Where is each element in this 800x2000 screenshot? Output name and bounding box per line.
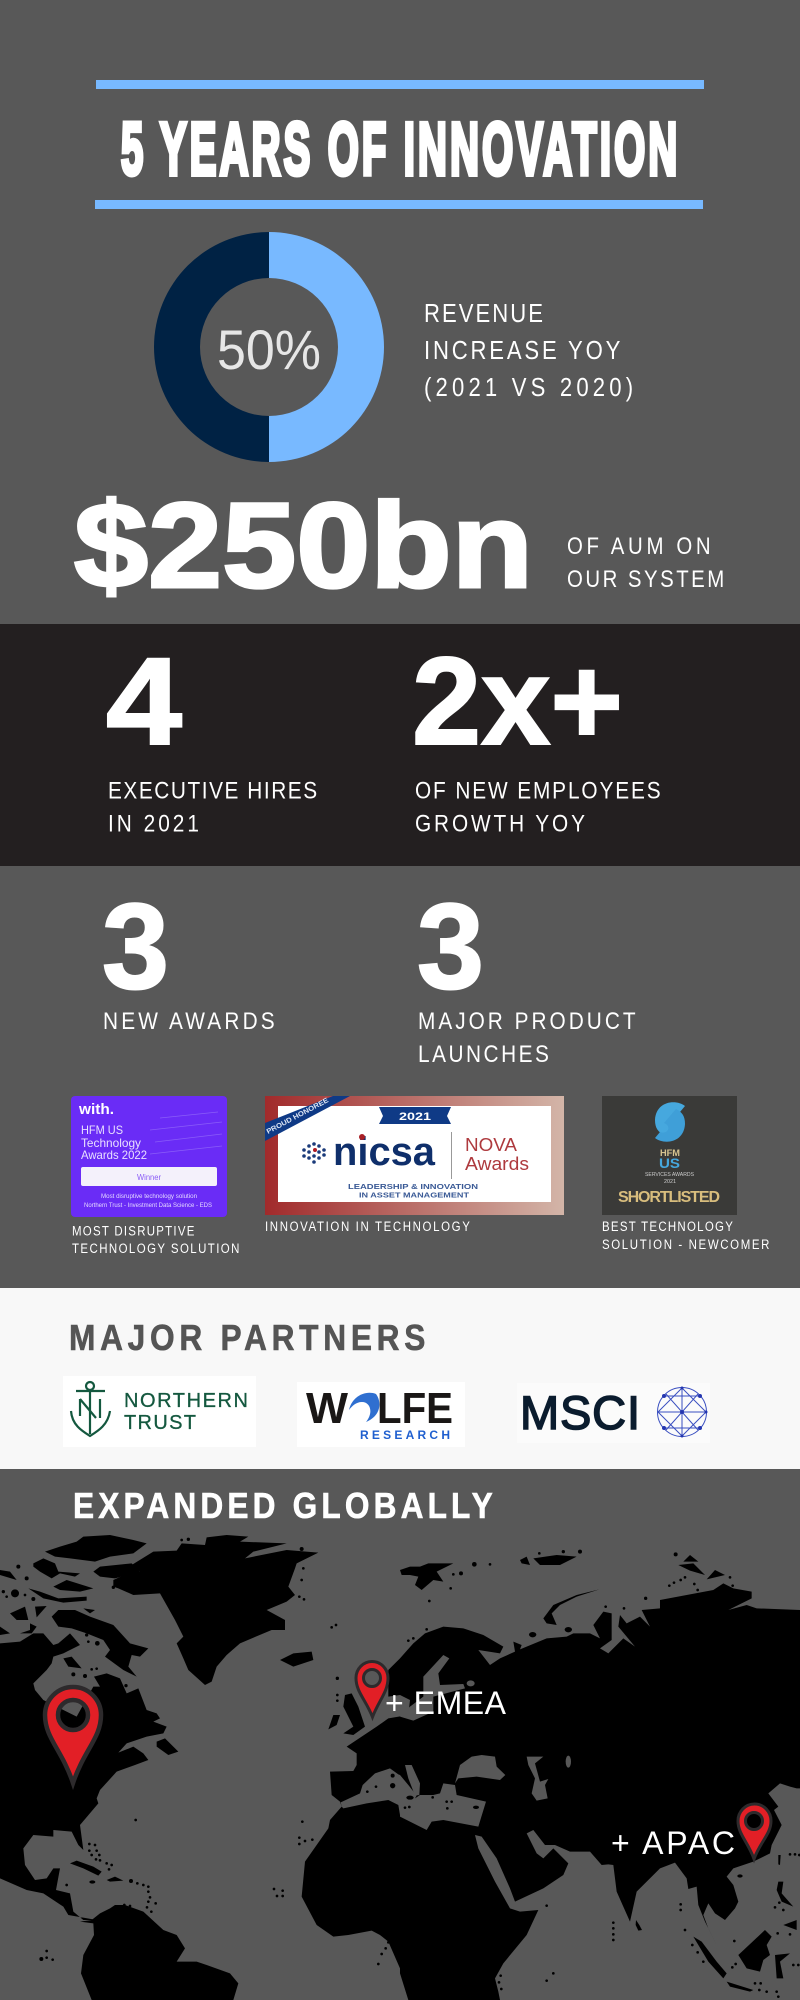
logo: Wolfe Research: LFE: [377, 1384, 453, 1433]
award captions: MOST DISRUPTIVE: [72, 1224, 194, 1239]
award badge: HFM US shortlisted: SHORTLISTED: [618, 1189, 720, 1206]
panel: major partners: [0, 1288, 800, 1469]
award badge: HFM US shortlisted: HFM: [660, 1148, 680, 1158]
donut chart: 50% revenue increase: [154, 232, 384, 462]
heading: major partners: MAJOR PARTNERS: [69, 1318, 425, 1358]
revenue label: [424, 299, 633, 402]
award badge: HFM US shortlisted: SERVICES AWARDS: [645, 1172, 695, 1178]
stat: major product launches: MAJOR PRODUCT: [418, 1006, 636, 1034]
award badge: nicsa NOVA: Awards: [465, 1154, 529, 1174]
heading: expanded globally: EXPANDED GLOBALLY: [73, 1486, 493, 1526]
stat: major product launches: 3: [417, 878, 484, 1014]
logo: MSCI: [517, 1383, 710, 1443]
stat: new awards: NEW AWARDS: [103, 1006, 275, 1034]
stat: new employee growth: [412, 633, 661, 837]
award badge: nicsa NOVA: 2021: [399, 1111, 431, 1123]
award badge: HFM US shortlisted: US: [659, 1155, 680, 1171]
stat: new awards: [102, 878, 275, 1034]
award badge: nicsa NOVA: nicsa: [333, 1130, 436, 1174]
award badge: with intelligence HFM: [71, 1096, 227, 1217]
award badge: with intelligence HFM: Winner: [137, 1173, 161, 1182]
Eurasia and Africa: [302, 1583, 800, 2000]
award badge: nicsa NOVA: IN ASSET MANAGEMENT: [359, 1190, 469, 1200]
award badge: with intelligence HFM: Awards 2022: [81, 1148, 147, 1162]
award badge: with intelligence HFM: Most disruptive technology solution: [101, 1194, 197, 1200]
pin: EMEA: [356, 1662, 388, 1717]
award badge: nicsa NOVA: NOVA: [465, 1135, 517, 1155]
logo: Northern Trust: NORTHERN: [124, 1390, 248, 1412]
stat: new employee growth: 2x+: [412, 633, 623, 771]
award badge: with intelligence HFM: with.: [78, 1101, 114, 1118]
award badge: nicsa NOVA: LEADERSHIP & INNOVATION: [348, 1182, 478, 1191]
label: EMEA: + EMEA: [385, 1685, 507, 1721]
title block: 5 YEARS OF INNOVATION: [121, 107, 677, 191]
AUM stat: OF AUM ON: [567, 532, 711, 559]
award badge: HFM US shortlisted: 2021: [664, 1179, 676, 1185]
revenue label: REVENUE: [424, 299, 543, 328]
revenue label: INCREASE YOY: [424, 336, 620, 365]
stat: new employee growth: GROWTH YOY: [415, 809, 585, 837]
pin: North America: [45, 1687, 101, 1783]
stat: new employee growth: OF NEW EMPLOYEES: [415, 776, 661, 804]
logo: Wolfe Research: W: [306, 1384, 348, 1433]
stat: new awards: 3: [102, 878, 169, 1014]
award badge: with intelligence HFM: Technology: [81, 1136, 141, 1150]
award captions: TECHNOLOGY SOLUTION: [72, 1241, 239, 1256]
logo: MSCI: MSCI: [520, 1386, 640, 1439]
award captions: BEST TECHNOLOGY: [602, 1219, 733, 1234]
small islands: [2, 1538, 800, 1998]
award captions: [72, 1219, 769, 1256]
logo: Wolfe Research: [297, 1382, 465, 1447]
revenue label: (2021 VS 2020): [424, 373, 633, 402]
AUM stat: $250bn: [74, 477, 533, 613]
award badge: nicsa NOVA: PROUD HONOREE: [266, 1097, 330, 1136]
stat: executive hires: [106, 633, 317, 837]
logo: Northern Trust: TRUST: [124, 1412, 196, 1434]
award badge: nicsa NOVA: [265, 1096, 564, 1215]
stat: major product launches: LAUNCHES: [418, 1039, 549, 1067]
stat: major product launches: [417, 878, 636, 1067]
award captions: SOLUTION - NEWCOMER: [602, 1237, 769, 1252]
panel: hires and employees: [0, 624, 800, 866]
award badge: HFM US shortlisted: [602, 1096, 737, 1215]
AUM stat: OUR SYSTEM: [567, 565, 724, 592]
award captions: INNOVATION IN TECHNOLOGY: [265, 1219, 470, 1234]
label: APAC: + APAC: [611, 1825, 735, 1861]
world map: [0, 1535, 800, 2000]
stat: executive hires: 4: [106, 633, 182, 771]
logo: Northern Trust: [63, 1376, 256, 1447]
pin: APAC: [738, 1804, 771, 1859]
inland water: [341, 1655, 571, 1830]
donut chart: 50% revenue increase: 50%: [217, 318, 321, 381]
award badge: with intelligence HFM: Northern Trust - Investment Data Science - EDS: [84, 1203, 212, 1209]
stat: executive hires: EXECUTIVE HIRES: [108, 776, 317, 804]
AUM stat: [74, 477, 724, 613]
logo: Wolfe Research: RESEARCH: [360, 1428, 450, 1442]
award badge: with intelligence HFM: HFM US: [81, 1123, 123, 1137]
title block: [95, 80, 704, 209]
stat: executive hires: IN 2021: [108, 809, 199, 837]
